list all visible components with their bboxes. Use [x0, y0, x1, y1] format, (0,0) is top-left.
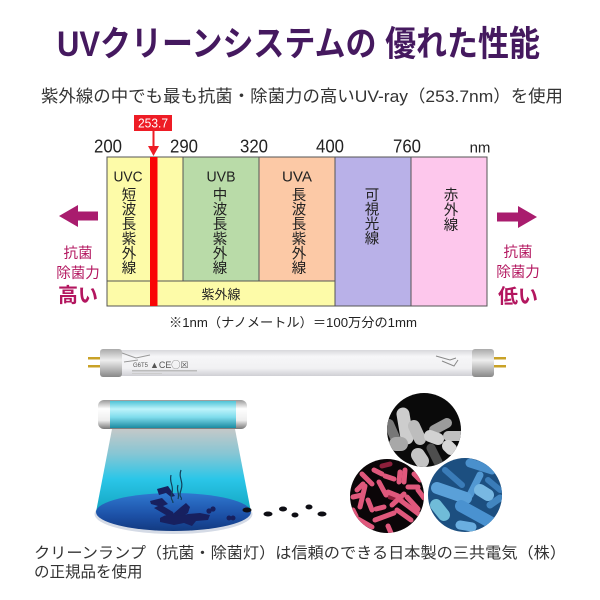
- panel: UVA band: 外: [292, 245, 307, 262]
- smoke wisps: [171, 470, 182, 503]
- UV lamp tube photo: G6T5: [133, 363, 149, 369]
- panel: UVB band: 紫: [213, 231, 227, 248]
- title: UVクリーンシステムの 優れた性能: [57, 25, 540, 64]
- UV lamp tube photo: [88, 349, 506, 377]
- axis labels: nm: [470, 140, 490, 156]
- callout: 253.7 marker: 253.7: [138, 116, 168, 130]
- panel: UVB band: 外: [213, 245, 228, 262]
- panel: UVA band: [259, 157, 335, 281]
- photo: grey bacteria: [387, 393, 462, 467]
- panel: ultraviolet row: [107, 281, 335, 306]
- UV lamp tube photo: ▲CE◯☒: [150, 360, 188, 370]
- caption: クリーンランプ（抗菌・除菌灯）は信頼のできる日本製の三共電気（株）: [34, 544, 566, 562]
- panel: UVC band: 紫: [122, 231, 136, 248]
- panel: UVA band: 紫: [292, 231, 306, 248]
- panel: UVB band: 波: [213, 202, 228, 219]
- text block: low germicidal power: 除菌力: [496, 264, 540, 281]
- text block: high germicidal power: [56, 245, 100, 307]
- illustration: lamp irradiating germs: [94, 400, 326, 534]
- axis labels: 290: [170, 136, 198, 156]
- panel: visible light band: 視: [365, 202, 380, 218]
- panel: UVC band: 波: [122, 202, 137, 219]
- panel: UVB band: [183, 157, 259, 281]
- axis labels: [94, 136, 490, 156]
- panel: infrared band: [411, 157, 487, 306]
- panel: UVA band: 長: [292, 188, 306, 204]
- panel: UVA band: 長: [292, 217, 306, 233]
- arrow: left, higher power: [59, 205, 98, 227]
- panel: UVB band: UVB: [206, 168, 236, 186]
- axis labels: 400: [316, 136, 344, 156]
- text block: low germicidal power: [496, 244, 540, 308]
- text block: high germicidal power: 高い: [58, 284, 98, 307]
- panel: ultraviolet row: 紫外線: [201, 287, 241, 302]
- panel: UVC band: 長: [122, 217, 136, 233]
- drifting germs: [206, 504, 326, 520]
- axis labels: 200: [94, 136, 122, 156]
- panel: UVA band: 線: [292, 260, 307, 277]
- subtitle: 紫外線の中でも最も抗菌・除菌力の高いUV-ray（253.7nm）を使用: [41, 86, 563, 106]
- panel: infrared band: 赤: [444, 187, 459, 204]
- irradiated surface: [96, 493, 251, 531]
- panel: UVC band: [107, 157, 183, 281]
- text block: low germicidal power: 抗菌: [504, 244, 532, 261]
- destroyed germ debris: [150, 486, 210, 526]
- panel: visible light band: 光: [365, 216, 379, 233]
- caption: の正規品を使用: [34, 563, 143, 581]
- text block: high germicidal power: 抗菌: [64, 245, 92, 262]
- panel: UVC band: 外: [122, 245, 137, 262]
- red marker bar at 253.7 nm: [150, 157, 158, 306]
- panel: UVA band: 波: [292, 202, 307, 219]
- panel: infrared band: 線: [444, 217, 459, 234]
- panel: UVC band: UVC: [114, 168, 143, 186]
- footnote: ※1nm（ナノメートル）＝100万分の1mm: [169, 315, 417, 330]
- photo: pink bacteria: [350, 459, 424, 533]
- text block: high germicidal power: 除菌力: [56, 265, 100, 282]
- caption: [34, 544, 566, 581]
- axis labels: 760: [393, 136, 421, 156]
- panel: visible light band: [335, 157, 411, 306]
- panel: UVC band: 線: [122, 260, 137, 277]
- panel: UVA band: UVA: [282, 168, 312, 186]
- panel: UVC band: 短: [122, 187, 136, 204]
- panel: visible light band: 線: [365, 230, 380, 248]
- callout: 253.7 marker: [134, 115, 172, 156]
- text block: low germicidal power: 低い: [498, 285, 538, 308]
- light cone: [96, 429, 251, 512]
- photo: blue bacteria: [428, 458, 502, 532]
- panel: visible light band: 可: [365, 188, 379, 204]
- panel: UVB band: 長: [213, 217, 227, 233]
- panel: UVB band: 線: [213, 260, 228, 277]
- wavelength spectrum chart: [94, 115, 490, 306]
- panel: UVB band: 中: [213, 187, 227, 204]
- panel: infrared band: 外: [444, 202, 459, 219]
- floor shadow: [94, 494, 252, 534]
- lamp tube: [98, 400, 247, 429]
- axis labels: 320: [240, 136, 268, 156]
- arrow: right, lower power: [497, 206, 537, 228]
